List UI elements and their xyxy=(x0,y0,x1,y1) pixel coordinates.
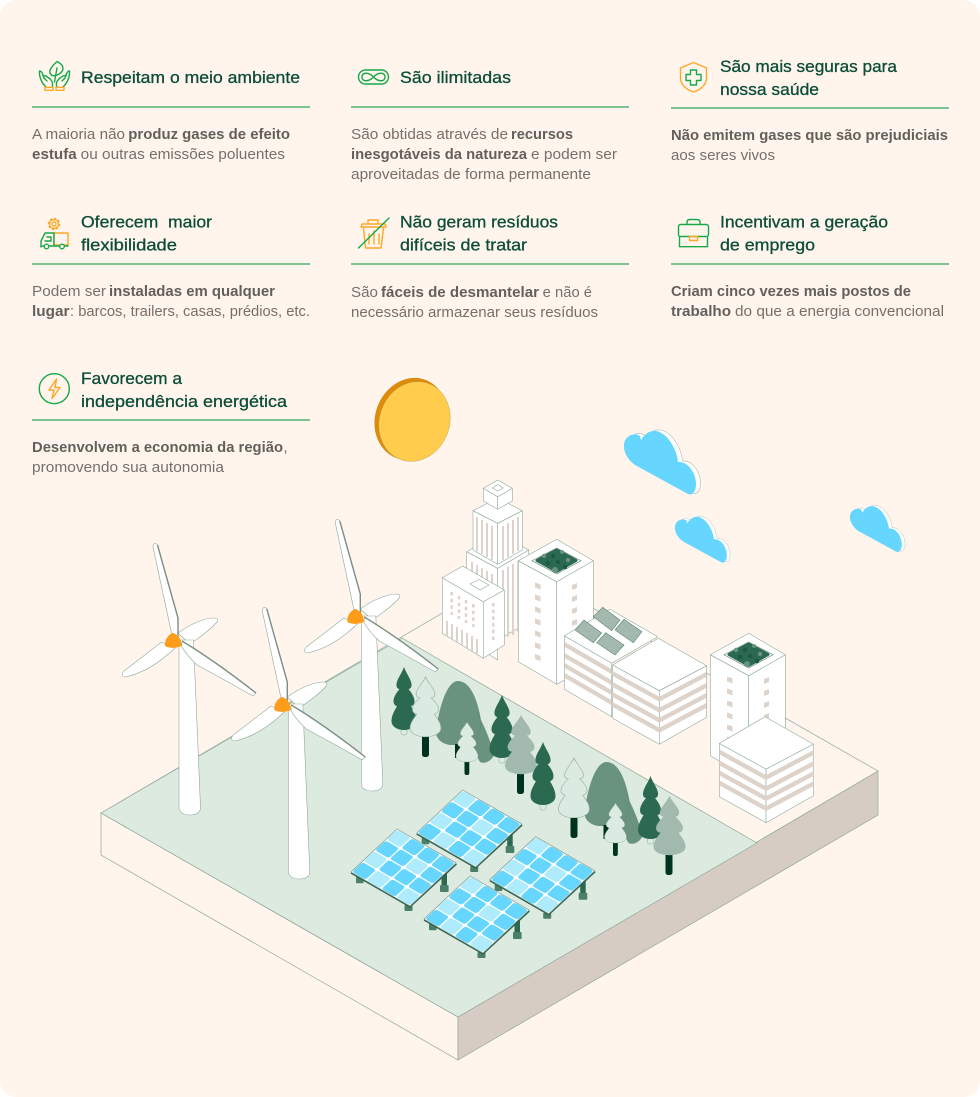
body text: aos seres vivos xyxy=(671,148,775,164)
body text xyxy=(671,128,948,164)
body text: instaladas em qualquer xyxy=(109,284,275,300)
body text: São obtidas através de xyxy=(351,127,508,143)
body text: necessário armazenar seus resíduos xyxy=(351,305,598,321)
illustration: city buildings xyxy=(442,480,813,823)
benefit: Respeitam o meio ambiente xyxy=(32,62,310,163)
benefit: Favorecem a independência energética xyxy=(32,369,310,476)
body text xyxy=(32,127,290,163)
illustration: trees xyxy=(392,667,686,875)
body text: São xyxy=(351,285,378,301)
icon: infinity xyxy=(358,70,388,84)
heading: Favorecem a xyxy=(81,369,183,388)
illustration: sun xyxy=(363,368,461,472)
icon: lightning bolt in circle xyxy=(39,374,69,404)
body text: estufa xyxy=(32,147,78,163)
body text xyxy=(351,127,617,183)
body text: promovendo sua autonomia xyxy=(32,460,225,476)
body text: Podem ser xyxy=(32,284,106,300)
icon: briefcase xyxy=(678,220,708,247)
benefit: Não geram resíduos difíceis de tratar xyxy=(351,212,629,321)
body text xyxy=(671,284,944,320)
tall building with green roof, right xyxy=(710,633,785,778)
benefit: São mais seguras para nossa saúde xyxy=(671,57,949,164)
icon: crossed-out trash can xyxy=(358,218,389,248)
body text: e podem ser xyxy=(531,147,617,163)
heading: de emprego xyxy=(720,236,815,254)
heading: Oferecem maior xyxy=(81,212,212,232)
short building xyxy=(442,566,504,658)
heading xyxy=(720,212,888,254)
heading: São mais seguras para xyxy=(720,57,898,76)
tall building with green roof xyxy=(518,539,593,684)
body text: ou outras emissões poluentes xyxy=(81,147,285,163)
illustration: wind turbines xyxy=(122,519,438,879)
heading xyxy=(720,57,898,99)
body text: do que a energia convencional xyxy=(735,304,944,320)
heading: flexibilidade xyxy=(81,236,177,254)
body text: Criam cinco vezes mais postos de xyxy=(671,284,911,300)
heading: difíceis de tratar xyxy=(400,236,527,254)
body text: Desenvolvem a economia da região xyxy=(32,440,283,456)
body text: : barcos, trailers, casas, prédios, etc. xyxy=(70,304,310,320)
benefit: São ilimitadas xyxy=(351,68,629,183)
body text: produz gases de efeito xyxy=(128,127,290,143)
icon: truck with gear xyxy=(41,218,68,249)
body text: inesgotáveis da natureza xyxy=(351,147,528,163)
body text: fáceis de desmantelar xyxy=(381,285,539,301)
heading xyxy=(81,212,212,254)
heading: nossa saúde xyxy=(720,80,819,99)
heading: Respeitam o meio ambiente xyxy=(81,68,300,87)
heading: independência energética xyxy=(81,392,288,411)
body text xyxy=(351,285,598,321)
body text: trabalho xyxy=(671,304,731,320)
heading: São ilimitadas xyxy=(400,68,511,87)
body text xyxy=(32,284,310,320)
heading: Incentivam a geração xyxy=(720,212,888,232)
heading xyxy=(81,369,288,411)
body text: recursos xyxy=(511,127,573,143)
illustration: clouds xyxy=(624,430,905,563)
body text: lugar xyxy=(32,304,70,320)
icon: shield with cross xyxy=(680,62,706,92)
illustration: solar panels xyxy=(351,790,595,958)
body text: aproveitadas de forma permanente xyxy=(351,167,591,183)
body text xyxy=(32,440,288,476)
body text: e não é xyxy=(543,285,592,301)
body text: Não emitem gases que são prejudiciais xyxy=(671,128,948,144)
benefit: Incentivam a geração de emprego xyxy=(671,212,949,320)
heading xyxy=(400,212,558,254)
illustration: isometric platform xyxy=(101,567,878,1060)
striped building, front xyxy=(719,717,813,823)
icon: hands holding leaf xyxy=(39,62,70,90)
body text: , xyxy=(284,440,288,456)
striped building xyxy=(613,638,707,744)
striped building with solar roof xyxy=(564,607,658,717)
skyscraper xyxy=(467,480,529,660)
heading: Não geram resíduos xyxy=(400,212,558,232)
benefit: Oferecem maior flexibilidade xyxy=(32,212,310,320)
body text: A maioria não xyxy=(32,127,125,143)
